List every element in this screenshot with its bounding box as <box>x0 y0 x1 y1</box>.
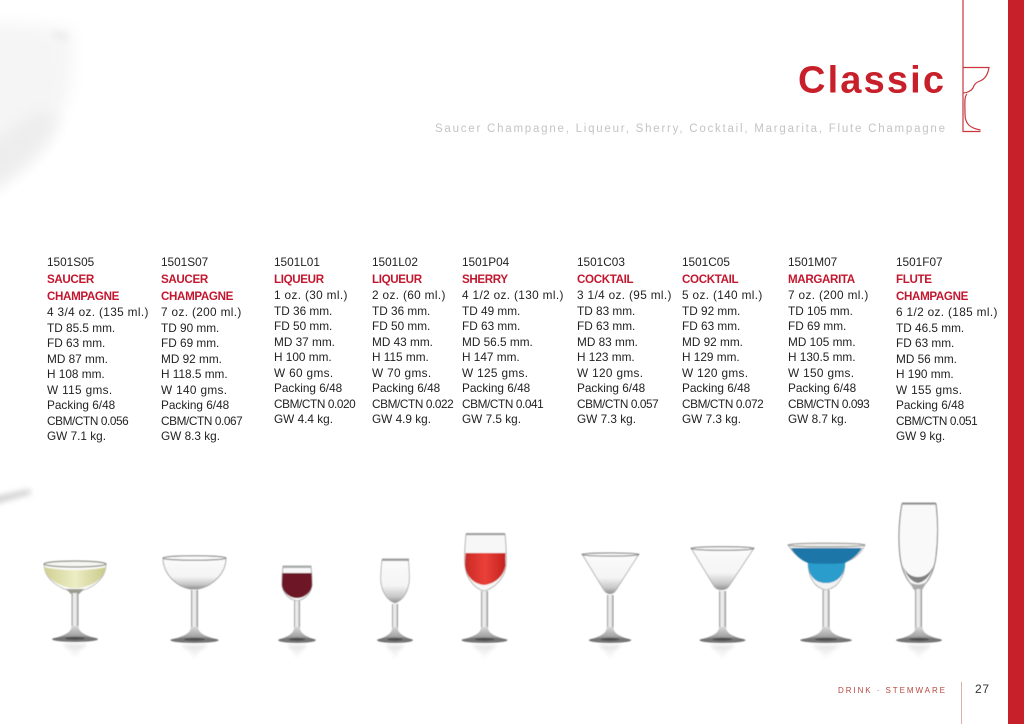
spec column 1501C03: W 120 gms. <box>577 366 643 380</box>
spec column 1501P04: H 147 mm. <box>462 350 520 364</box>
spec column 1501S05 <box>47 255 149 443</box>
spec column 1501C03: GW 7.3 kg. <box>577 412 636 426</box>
spec column 1501F07: Packing 6/48 <box>896 398 964 412</box>
title: Classic <box>798 60 944 102</box>
spec column 1501L01: W 60 gms. <box>274 366 334 380</box>
spec column 1501L02: H 115 mm. <box>372 350 429 364</box>
spec column 1501C03: COCKTAIL <box>577 273 633 286</box>
spec column 1501S05: SAUCER <box>47 273 94 286</box>
spec column 1501C05: COCKTAIL <box>682 273 738 286</box>
spec column 1501M07: GW 8.7 kg. <box>788 412 847 426</box>
spec column 1501P04: Packing 6/48 <box>462 381 530 395</box>
glass: flute champagne <box>896 502 942 659</box>
spec column 1501P04 <box>462 255 564 426</box>
red side bar <box>1008 0 1024 724</box>
spec column 1501C03 <box>577 255 672 426</box>
spec column 1501L01: GW 4.4 kg. <box>274 412 333 426</box>
spec column 1501M07: 7 oz. (200 ml.) <box>788 288 869 302</box>
spec column 1501C03: MD 83 mm. <box>577 335 638 349</box>
spec column 1501S07: MD 92 mm. <box>161 352 222 366</box>
page number: 27 <box>975 682 989 696</box>
glass: saucer champagne empty <box>163 556 226 659</box>
spec column 1501P04: MD 56.5 mm. <box>462 335 533 349</box>
spec column 1501S05: 4 3/4 oz. (135 ml.) <box>47 305 149 319</box>
spec column 1501C05: 1501C05 <box>682 255 730 269</box>
spec column 1501L02: LIQUEUR <box>372 273 422 286</box>
spec column 1501S07: GW 8.3 kg. <box>161 429 220 443</box>
spec column 1501F07: H 190 mm. <box>896 367 954 381</box>
spec column 1501M07: CBM/CTN 0.093 <box>788 397 869 411</box>
spec column 1501P04: 4 1/2 oz. (130 ml.) <box>462 288 564 302</box>
spec column 1501L02: Packing 6/48 <box>372 381 440 395</box>
spec column 1501F07: FLUTE <box>896 273 932 286</box>
spec column 1501L01: H 100 mm. <box>274 350 332 364</box>
spec column 1501L01: FD 50 mm. <box>274 319 332 333</box>
spec column 1501L01: MD 37 mm. <box>274 335 335 349</box>
spec column 1501P04: TD 49 mm. <box>462 304 520 318</box>
spec column 1501F07: MD 56 mm. <box>896 352 957 366</box>
glass: cocktail 3 1/4 oz <box>582 553 639 659</box>
spec column 1501M07: MD 105 mm. <box>788 335 856 349</box>
spec column 1501M07: MARGARITA <box>788 273 855 286</box>
spec column 1501S05: Packing 6/48 <box>47 398 115 412</box>
spec column 1501C03: 1501C03 <box>577 255 625 269</box>
spec column 1501C03: H 123 mm. <box>577 350 635 364</box>
spec column 1501S05: MD 87 mm. <box>47 352 108 366</box>
blurred background glass foot bottom left <box>0 489 31 505</box>
glass: liqueur empty <box>377 558 413 659</box>
spec column 1501C05: GW 7.3 kg. <box>682 412 741 426</box>
spec column 1501F07: TD 46.5 mm. <box>896 321 964 335</box>
spec column 1501F07: 1501F07 <box>896 255 943 269</box>
spec column 1501C05: Packing 6/48 <box>682 381 750 395</box>
footer divider <box>961 682 962 724</box>
spec column 1501L01: 1 oz. (30 ml.) <box>274 288 348 302</box>
spec column 1501M07: H 130.5 mm. <box>788 350 856 364</box>
spec column 1501L01: Packing 6/48 <box>274 381 342 395</box>
spec column 1501M07: 1501M07 <box>788 255 837 269</box>
spec column 1501C05: TD 92 mm. <box>682 304 740 318</box>
spec column 1501C05: W 120 gms. <box>682 366 748 380</box>
spec column 1501S05: CHAMPAGNE <box>47 290 119 303</box>
spec column 1501S05: 1501S05 <box>47 255 94 269</box>
spec column 1501S07 <box>161 255 242 443</box>
spec column 1501L01: TD 36 mm. <box>274 304 332 318</box>
spec column 1501L01: 1501L01 <box>274 255 320 269</box>
spec column 1501F07: CBM/CTN 0.051 <box>896 414 977 428</box>
spec column 1501C05: FD 63 mm. <box>682 319 740 333</box>
spec column 1501C05: MD 92 mm. <box>682 335 743 349</box>
spec column 1501L02: 2 oz. (60 ml.) <box>372 288 446 302</box>
spec column 1501L02: TD 36 mm. <box>372 304 430 318</box>
spec column 1501S05: H 108 mm. <box>47 367 105 381</box>
spec column 1501C03: 3 1/4 oz. (95 ml.) <box>577 288 672 302</box>
spec column 1501S05: CBM/CTN 0.056 <box>47 414 128 428</box>
spec column 1501C05: 5 oz. (140 ml.) <box>682 288 763 302</box>
spec column 1501P04: GW 7.5 kg. <box>462 412 521 426</box>
footer section label: DRINK · STEMWARE <box>838 686 945 695</box>
blurred background glass top left <box>0 22 72 196</box>
spec column 1501L01: CBM/CTN 0.020 <box>274 397 355 411</box>
spec column 1501C05: CBM/CTN 0.072 <box>682 397 763 411</box>
spec column 1501S05: TD 85.5 mm. <box>47 321 115 335</box>
spec column 1501M07: FD 69 mm. <box>788 319 846 333</box>
spec column 1501L01 <box>274 255 356 426</box>
glass: liqueur with red wine <box>278 566 316 659</box>
spec column 1501F07: GW 9 kg. <box>896 429 945 443</box>
spec column 1501S05: FD 63 mm. <box>47 336 105 350</box>
spec column 1501L02: MD 43 mm. <box>372 335 433 349</box>
spec column 1501C03: CBM/CTN 0.057 <box>577 397 658 411</box>
spec column 1501P04: FD 63 mm. <box>462 319 520 333</box>
spec column 1501P04: CBM/CTN 0.041 <box>462 397 543 411</box>
spec column 1501S07: W 140 gms. <box>161 383 227 397</box>
spec column 1501C03: FD 63 mm. <box>577 319 635 333</box>
spec column 1501S07: 1501S07 <box>161 255 208 269</box>
spec column 1501C03: Packing 6/48 <box>577 381 645 395</box>
glass: sherry with red drink <box>462 533 508 659</box>
spec column 1501S07: CHAMPAGNE <box>161 290 233 303</box>
glass: margarita with blue drink <box>788 543 865 659</box>
spec column 1501S07: CBM/CTN 0.067 <box>161 414 242 428</box>
spec column 1501M07 <box>788 255 870 426</box>
spec column 1501S05: GW 7.1 kg. <box>47 429 106 443</box>
spec column 1501S07: FD 69 mm. <box>161 336 219 350</box>
spec column 1501S07: TD 90 mm. <box>161 321 219 335</box>
spec column 1501F07: FD 63 mm. <box>896 336 954 350</box>
spec column 1501S07: SAUCER <box>161 273 208 286</box>
spec column 1501C05 <box>682 255 764 426</box>
spec column 1501C05: H 129 mm. <box>682 350 740 364</box>
spec column 1501M07: W 150 gms. <box>788 366 854 380</box>
spec column 1501P04: W 125 gms. <box>462 366 528 380</box>
spec column 1501S05: W 115 gms. <box>47 383 113 397</box>
spec column 1501S07: Packing 6/48 <box>161 398 229 412</box>
spec column 1501L02: FD 50 mm. <box>372 319 430 333</box>
spec column 1501S07: H 118.5 mm. <box>161 367 228 381</box>
spec column 1501L01: LIQUEUR <box>274 273 324 286</box>
glass: saucer champagne with white wine <box>44 561 106 658</box>
spec column 1501F07: CHAMPAGNE <box>896 290 968 303</box>
spec column 1501S07: 7 oz. (200 ml.) <box>161 305 242 319</box>
icon: glass outline <box>963 0 989 132</box>
spec column 1501F07 <box>896 255 998 443</box>
glass: cocktail 5 oz <box>691 547 754 659</box>
spec column 1501L02: CBM/CTN 0.022 <box>372 397 453 411</box>
spec column 1501L02: W 70 gms. <box>372 366 432 380</box>
spec column 1501M07: Packing 6/48 <box>788 381 856 395</box>
spec column 1501P04: 1501P04 <box>462 255 509 269</box>
spec column 1501L02: GW 4.9 kg. <box>372 412 431 426</box>
spec column 1501P04: SHERRY <box>462 273 508 286</box>
spec column 1501M07: TD 105 mm. <box>788 304 853 318</box>
spec column 1501F07: W 155 gms. <box>896 383 962 397</box>
spec column 1501L02: 1501L02 <box>372 255 418 269</box>
spec column 1501L02 <box>372 255 454 426</box>
spec column 1501F07: 6 1/2 oz. (185 ml.) <box>896 305 998 319</box>
spec column 1501C03: TD 83 mm. <box>577 304 635 318</box>
subtitle: Saucer Champagne, Liqueur, Sherry, Cocktail, Margarita, Flute Champagne <box>435 123 945 135</box>
